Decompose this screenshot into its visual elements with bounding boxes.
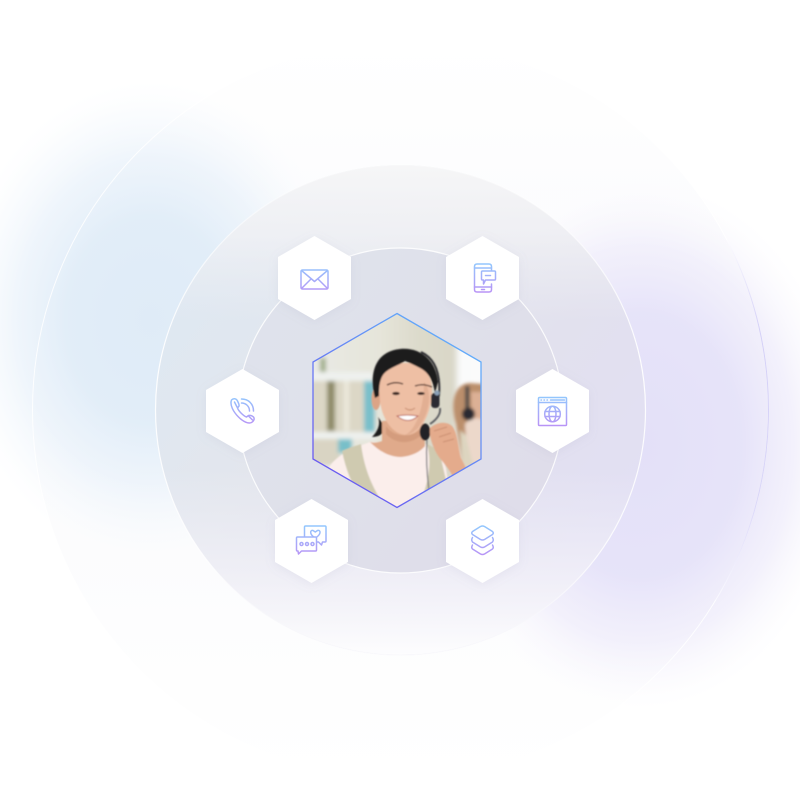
node: layered data: [446, 499, 519, 583]
node: chat messages: [275, 499, 348, 583]
background: blue glow: [0, 80, 345, 560]
headband: [421, 352, 439, 396]
right apron strap: [424, 444, 446, 492]
ponytail hair: [372, 417, 385, 437]
photo: blurred office background: [314, 314, 480, 478]
icon: phone with speech bubble: [474, 264, 496, 292]
photo: background colleague: [453, 383, 484, 470]
hand: [430, 423, 466, 477]
hair: [373, 349, 438, 398]
inner ring: [238, 248, 563, 573]
ear: [372, 388, 380, 410]
face: [379, 363, 432, 435]
central agent photo: [312, 312, 482, 508]
nose shadow: [405, 408, 415, 410]
node: mobile chat: [446, 236, 519, 320]
photo: agent: [327, 349, 466, 512]
node: phone call: [206, 369, 279, 453]
left apron strap: [342, 444, 379, 496]
node: web browser: [516, 369, 589, 453]
icon: stacked layers: [472, 526, 493, 554]
background: purple glow: [435, 180, 800, 710]
smile: [397, 415, 418, 420]
node: email: [278, 236, 351, 320]
infographic: support channels around an agent: [0, 124, 800, 668]
neck: [370, 418, 425, 457]
photo frame: [313, 314, 481, 508]
middle ring: [156, 165, 646, 655]
icon: browser window with globe: [538, 398, 566, 426]
icon: speech bubbles with heart: [296, 526, 326, 554]
icon: phone handset with signal: [231, 399, 254, 423]
shirt: [329, 442, 448, 506]
earpiece and mic: [431, 393, 440, 408]
eyes and brows: [387, 383, 432, 387]
icon: envelope: [301, 270, 328, 289]
